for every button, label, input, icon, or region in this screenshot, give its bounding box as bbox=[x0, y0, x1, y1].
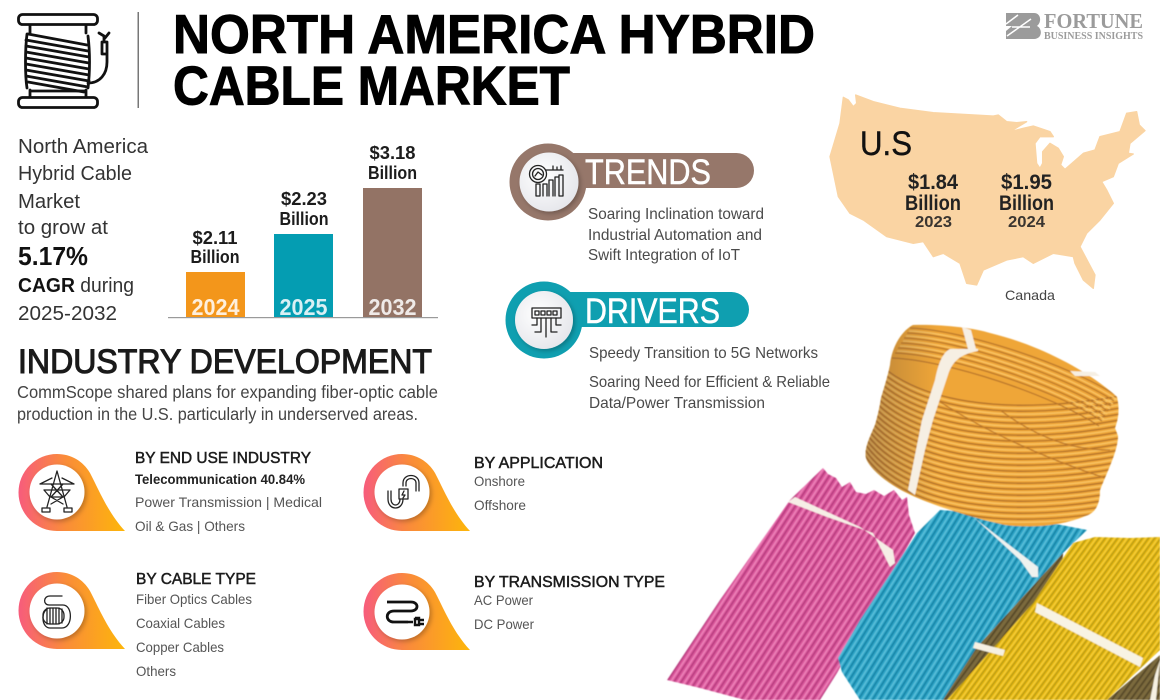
text block: drivers: Data/Power Transmission bbox=[589, 395, 765, 412]
text block: trends bbox=[588, 206, 764, 264]
bar: 2032: $3.18 bbox=[370, 143, 416, 163]
map: U.S market size: 2024 bbox=[1008, 214, 1045, 231]
panel: by cable type: Others bbox=[136, 663, 176, 679]
map: U.S market size: Billion bbox=[905, 192, 961, 215]
text block: market growth statement: CAGR during bbox=[18, 275, 134, 297]
map: U.S market size: $1.84 bbox=[908, 171, 958, 194]
text block: trends: Soaring Inclination toward bbox=[588, 206, 764, 223]
icon: magnifier and bars bbox=[530, 166, 563, 196]
panel: by end use industry: Oil & Gas | Others bbox=[135, 518, 245, 534]
panel: by cable type: BY CABLE TYPE bbox=[136, 571, 256, 588]
bar: 2025 bbox=[274, 189, 333, 320]
panel: by end use industry: BY END USE INDUSTRY bbox=[135, 450, 311, 467]
text block: market growth statement: to grow at bbox=[18, 217, 108, 239]
bar: 2024: $2.11 bbox=[192, 228, 238, 248]
cable tie bbox=[908, 349, 978, 495]
bar: 2025: Billion bbox=[280, 209, 328, 229]
icon: transmission tower pin bbox=[19, 454, 125, 531]
text block: drivers: Speedy Transition to 5G Networks bbox=[589, 345, 818, 362]
icon: joined cable pin bbox=[364, 454, 470, 531]
map: U.S market size: $1.95 bbox=[1001, 171, 1052, 194]
text block: market growth statement bbox=[18, 136, 149, 325]
text block: industry development: CommScope shared plans for expanding fiber-optic cable bbox=[17, 382, 438, 402]
text block: market growth statement: Market bbox=[18, 191, 80, 213]
title bbox=[173, 3, 815, 116]
heading: industry development: INDUSTRY DEVELOPMENT bbox=[18, 343, 432, 381]
coil: pink bbox=[667, 468, 915, 700]
bar: 2024: 2024 bbox=[192, 294, 240, 320]
bar: 2025: 2025 bbox=[280, 294, 328, 320]
text block: market growth statement: Hybrid Cable bbox=[18, 163, 132, 185]
label: Canada: Canada bbox=[1005, 287, 1055, 303]
panel: by transmission type: BY TRANSMISSION TYPE bbox=[474, 574, 665, 591]
text block: industry development: production in the U.S. particularly in underserved areas. bbox=[17, 404, 418, 424]
coil: brown bbox=[943, 553, 1160, 700]
panel: by application: BY APPLICATION bbox=[474, 455, 603, 472]
title: CABLE MARKET bbox=[173, 54, 570, 116]
panel: by transmission type: DC Power bbox=[474, 616, 534, 632]
map: U.S market size bbox=[830, 95, 1145, 288]
coil: orange bbox=[860, 320, 1125, 530]
text block: market growth statement: 2025-2032 bbox=[18, 303, 117, 325]
text block: drivers bbox=[589, 345, 830, 412]
heading: trends: TRENDS bbox=[585, 153, 711, 192]
text block: industry development bbox=[17, 382, 438, 424]
coil: yellow bbox=[947, 537, 1160, 700]
panel: trends bbox=[510, 144, 764, 264]
title: NORTH AMERICA HYBRID bbox=[173, 3, 815, 65]
map: U.S market size: 2023 bbox=[915, 214, 952, 231]
text block: trends: Swift Integration of IoT bbox=[588, 247, 740, 264]
bar: 2025: $2.23 bbox=[281, 189, 327, 209]
panel: by transmission type bbox=[364, 573, 665, 650]
map: U.S market size: U.S bbox=[860, 125, 912, 163]
panel: by cable type: Fiber Optics Cables bbox=[136, 591, 252, 607]
logo: Fortune Business Insights: FORTUNE bbox=[1044, 9, 1143, 33]
icon: power cord pin bbox=[364, 573, 470, 650]
panel: by cable type: Copper Cables bbox=[136, 639, 224, 655]
bar: 2032: 2032 bbox=[368, 294, 416, 320]
coil: blue bbox=[838, 510, 1087, 700]
image: cable coils bbox=[667, 320, 1160, 700]
panel: by application bbox=[364, 454, 603, 531]
map shape bbox=[830, 95, 1145, 288]
panel: by application: Offshore bbox=[474, 497, 526, 513]
panel: by cable type bbox=[19, 571, 256, 679]
bar: 2032 bbox=[363, 143, 422, 320]
heading: drivers: DRIVERS bbox=[585, 292, 720, 331]
logo: Fortune Business Insights: BUSINESS INSIGHTS bbox=[1044, 31, 1143, 42]
text block: drivers: Soaring Need for Efficient & Reliable bbox=[589, 374, 830, 391]
map: U.S market size: Billion bbox=[999, 192, 1054, 215]
icon: cable spool bbox=[18, 14, 109, 108]
logo: Fortune Business Insights bbox=[1006, 9, 1143, 42]
bar chart: market size bbox=[168, 143, 438, 320]
bar: 2024 bbox=[186, 228, 245, 320]
panel: by application: Onshore bbox=[474, 473, 525, 489]
text block: trends: Industrial Automation and bbox=[588, 227, 762, 244]
bar: 2032: Billion bbox=[368, 163, 417, 183]
divider bbox=[138, 12, 139, 108]
bar: 2024: Billion bbox=[190, 247, 240, 267]
panel: drivers bbox=[506, 282, 830, 412]
text block: market growth statement: North America bbox=[18, 136, 149, 158]
panel: by cable type: Coaxial Cables bbox=[136, 615, 225, 631]
icon: circuit bbox=[532, 308, 561, 337]
panel: by transmission type: AC Power bbox=[474, 592, 533, 608]
panel: by end use industry bbox=[19, 450, 322, 534]
panel: by end use industry: Telecommunication 40.84% bbox=[135, 472, 305, 487]
panel: by end use industry: Power Transmission | Medical bbox=[135, 494, 322, 510]
icon: cable coil pin bbox=[19, 572, 125, 649]
text block: market growth statement: 5.17% bbox=[18, 241, 88, 271]
